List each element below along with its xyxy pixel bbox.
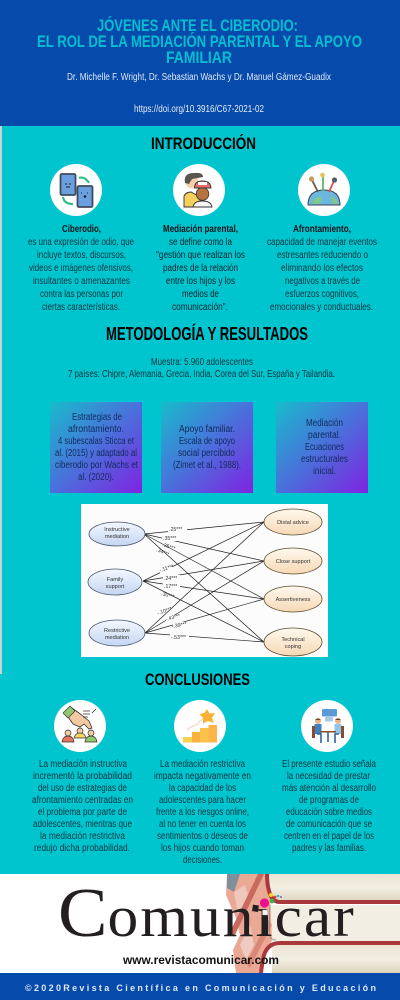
right ellipses (264, 509, 322, 656)
panel: apoyo familiar: Escala de apoyo (179, 436, 235, 447)
coefficients: -.11*** (159, 564, 175, 574)
text: ciberodio: Ciberodio, (62, 224, 101, 235)
icon: rising bars with star (174, 700, 226, 752)
authors: Dr. Michelle F. Wright, Dr. Sebastian Wachs y Dr. Manuel Gámez-Guadix (67, 72, 331, 83)
text: mediación instructiva: redujo dicha probabilidad. (34, 843, 130, 854)
text: ciberodio: contra las personas por (40, 289, 124, 300)
heading: conclusiones: CONCLUSIONES (145, 670, 250, 689)
panel: estrategias: ciberodio por Wachs et (55, 460, 138, 471)
panel: estrategias: 4 subescalas Sticca et (58, 436, 134, 447)
text: afrontamiento: Afrontamiento, (293, 224, 351, 235)
text: mediación restrictiva: al no tener en cuenta los (159, 819, 246, 830)
panel: mediación parental: Mediación (306, 418, 343, 429)
text: presente estudio: padres y las familias. (292, 843, 366, 854)
text: mediación instructiva: el problema por parte de (38, 807, 127, 818)
coefficients: .25*** (169, 527, 182, 533)
coefficients: .35*** (163, 536, 176, 542)
icon: hand picking person (54, 700, 106, 752)
variable labels: coping (285, 644, 301, 650)
panel: estrategias: al. (2020). (78, 472, 114, 483)
coefficients: -.39*** (171, 621, 187, 630)
text: mediación restrictiva: La mediación restrictiva (160, 759, 245, 770)
logo usb i (252, 892, 269, 936)
heading: metodología y resultados: METODOLOGÍA Y RESULTADOS (106, 323, 308, 344)
text: mediación parental: se define como la (169, 237, 232, 248)
text: presente estudio: de comunicación que se (286, 819, 372, 830)
panel: apoyo familiar: social percibido (178, 448, 235, 459)
variable labels: mediation (105, 534, 129, 540)
text: mediación parental: entre los hijos y los (166, 276, 235, 287)
title (37, 16, 362, 67)
text: mediación instructiva: la mediación restrictiva (40, 831, 125, 842)
panel: apoyo familiar (161, 402, 253, 493)
variable labels: Close support (276, 559, 311, 565)
panel: estrategias: al. (2015) y adaptado al (55, 448, 137, 459)
text: afrontamiento: esfuerzos cognitivos, (285, 289, 359, 300)
coefficients: .35*** (161, 542, 176, 552)
panel: estrategias: Estrategias de (72, 412, 122, 423)
text: mediación restrictiva: decisiones. (183, 855, 222, 866)
coefficients (155, 526, 190, 641)
coefficients: .17*** (164, 584, 177, 590)
variable labels: mediation (105, 635, 129, 641)
panel: estrategias (50, 402, 142, 493)
header band (0, 0, 400, 126)
text: ciberodio (28, 224, 134, 313)
text: mediación restrictiva (154, 759, 251, 866)
text: afrontamiento: capacidad de manejar eventos (267, 237, 377, 248)
text: presente estudio (282, 759, 376, 854)
text: mediación instructiva: del uso de estrategias de (38, 783, 127, 794)
title: FAMILIAR (166, 49, 232, 67)
panel: apoyo familiar: (Zimet et al., 1988). (173, 460, 241, 471)
text: presente estudio: centren en el papel de los (284, 831, 374, 842)
coefficients: -.53*** (171, 635, 186, 641)
text: presente estudio: El presente estudio señala (282, 759, 376, 770)
text: mediación parental: padres de la relación (163, 263, 238, 274)
variable labels: Assertiveness (276, 597, 311, 603)
coefficients: -.10*** (157, 606, 173, 617)
text: mediación instructiva (32, 759, 133, 854)
books photo (226, 874, 400, 973)
text: ciberodio: es una expresión de odio, que (28, 237, 134, 248)
variable labels: Distal advice (277, 520, 309, 526)
panel: mediación parental (276, 402, 368, 493)
text: afrontamiento: eliminando los efectos (281, 263, 363, 274)
text: presente estudio: de programas de (299, 795, 359, 806)
icon: meeting (301, 700, 353, 752)
variable labels (104, 520, 311, 650)
panel: mediación parental: estructurales (301, 454, 348, 465)
heading: introducción: INTRODUCCIÓN (151, 134, 256, 153)
text: mediación parental: medios de (182, 289, 219, 300)
text: mediación parental: Mediación parental, (163, 224, 238, 235)
text: mediación instructiva: afrontamiento centradas en (32, 795, 133, 806)
variable labels: Instructive (104, 527, 130, 533)
text: presente estudio: la necesidad de prestar (287, 771, 371, 782)
text: mediación restrictiva: sentimientos o deseos de (157, 831, 248, 842)
sample text: 7 países: Chipre, Alemania, Grecia, India, Corea del Sur, España y Tailandia. (68, 369, 335, 380)
text: ciberodio: insultantes o amenazantes (33, 276, 130, 287)
text: mediación restrictiva: frente a los riesgos online, (156, 807, 249, 818)
text: mediación restrictiva: impacta negativamente en (154, 771, 251, 782)
website: www.revistacomunicar.com (122, 953, 279, 967)
variable labels: support (106, 584, 125, 590)
text: ciberodio: incluye textos, discursos, (37, 250, 126, 261)
text: mediación instructiva: incrementó la probabilidad (33, 771, 132, 782)
text: mediación instructiva: adolescentes, mientras que (33, 819, 132, 830)
coefficients: .34*** (155, 547, 170, 558)
text: ciberodio: videos e imágenes ofensivos, (29, 263, 133, 274)
coefficients: .30*** (160, 591, 175, 600)
icon: parent and child (173, 164, 225, 216)
text: mediación parental: comunicación". (172, 302, 228, 313)
logo wordmark: Comunicar (58, 874, 356, 952)
panel: mediación parental: parental. (308, 430, 341, 441)
sample text (68, 357, 335, 380)
footer (0, 973, 400, 1000)
variable labels: Technical (281, 637, 305, 643)
text: mediación parental (156, 224, 245, 313)
text: mediación restrictiva: los hijos cuando toman (161, 843, 244, 854)
doi: https://doi.org/10.3916/C67-2021-02 (134, 104, 264, 115)
sample text: Muestra: 5.960 adolescentes (151, 357, 253, 368)
text: afrontamiento: estresantes reduciendo o (277, 250, 368, 261)
text: afrontamiento: negativos a través de (285, 276, 360, 287)
variable labels: Family (107, 577, 123, 583)
left ellipses (88, 522, 145, 646)
logo band (0, 874, 400, 973)
variable labels: Restrictive (104, 628, 130, 634)
text: afrontamiento (267, 224, 377, 313)
text: mediación instructiva: La mediación instructiva (39, 759, 127, 770)
text: presente estudio: educación sobre medios (286, 807, 372, 818)
text: mediación restrictiva: la capacidad de los (169, 783, 236, 794)
panel: mediación parental: inicial. (313, 466, 336, 477)
text: presente estudio: más atención al desarrollo (282, 783, 376, 794)
logo dots (260, 893, 282, 908)
coefficients: -.43*** (165, 613, 181, 623)
icon: world with tools (298, 164, 350, 216)
icon: phones exchanging (50, 164, 102, 216)
text: ciberodio: ciertas características. (42, 302, 120, 313)
path diagram (81, 504, 328, 657)
coefficients: .24*** (164, 576, 177, 582)
panel: mediación parental: Ecuaciones (305, 442, 344, 453)
panel: apoyo familiar: Apoyo familiar. (179, 424, 235, 435)
text: afrontamiento: emocionales y conductuales. (270, 302, 373, 313)
panel: estrategias: afrontamiento. (68, 424, 124, 435)
footer: ©2020Revista Científica en Comunicación y Educación (25, 983, 376, 993)
text: mediación restrictiva: adolescentes para hacer (159, 795, 247, 806)
title: JÓVENES ANTE EL CIBERODIO: (97, 16, 298, 35)
text: mediación parental: "gestión que realizan los (156, 250, 245, 261)
